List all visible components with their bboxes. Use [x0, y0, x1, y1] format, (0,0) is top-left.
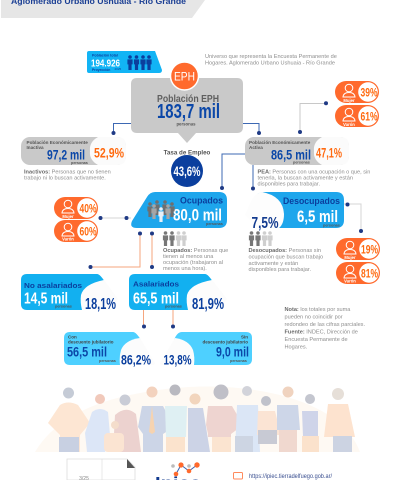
universe description: Universo que representa la Encuesta Permanente de — [205, 54, 337, 60]
text: PEA — [258, 170, 370, 188]
text: PEA: tenerla, la buscan activamente y están — [258, 176, 353, 182]
pills: ocupados gender: Varón — [62, 236, 74, 242]
panel: desocupados: Desocupados — [283, 196, 340, 207]
panel: desocupados — [245, 192, 344, 232]
pills: ocupados gender: Mujer — [62, 214, 74, 219]
text: nota y fuente: Fuente: INDEC, Dirección de — [284, 330, 358, 336]
panel: no asalariados — [21, 274, 118, 313]
universe description: Hogares. Aglomerado Urbano Ushuaia - Río Grande — [205, 60, 335, 66]
total population chip: 2025 — [114, 67, 122, 71]
text: ocupados: menos una hora). — [163, 266, 207, 272]
panel: población EPH: 183,7 mil — [157, 100, 220, 123]
panel: sin descuento jubilatorio: 9,0 mil — [216, 344, 249, 360]
panel: desocupados: 6,5 mil — [297, 208, 338, 226]
header banner — [1, 0, 205, 18]
text: desocupados: Desocupados: Personas sin — [248, 248, 321, 254]
panel: con descuento jubilatorio: Con — [68, 334, 77, 340]
icon: EPH badge — [170, 62, 198, 90]
text: PEA: PEA: Personas con una ocupación o que, sin — [258, 170, 370, 176]
text: desocupados: ocupación que buscan trabajo — [248, 254, 323, 260]
icon: desocupados people — [249, 231, 273, 246]
pills: ocupados gender: 40% — [80, 202, 97, 216]
text: inactivos: Inactivos: Personas que no tienen — [24, 170, 111, 176]
panel: población inactiva: 97,2 mil — [47, 146, 85, 162]
connector dots — [88, 101, 363, 328]
panel: población activa: personas — [293, 160, 310, 164]
panel: con descuento jubilatorio: 86,2% — [121, 352, 151, 368]
panel: población activa — [245, 137, 349, 165]
icon: document — [67, 459, 135, 480]
text: PEA: disponibles para trabajar. — [258, 182, 320, 188]
pills: PEA gender: Mujer — [343, 98, 355, 103]
text: nota y fuente: redondeo de las cifras parciales. — [284, 322, 365, 328]
panel: desocupados: 7,5% — [252, 215, 278, 232]
panel: población activa: 47,1% — [316, 144, 342, 160]
icon: ocupados people — [163, 231, 187, 246]
panel: población inactiva: 52,9% — [94, 144, 124, 160]
total population chip: 194.926 — [91, 58, 120, 69]
icon: EPH badge: EPH — [174, 70, 195, 84]
panel: ocupados — [131, 192, 227, 228]
panel: población activa: 86,5 mil — [271, 146, 311, 162]
panel: población inactiva — [21, 137, 126, 165]
tasa de empleo — [164, 150, 211, 187]
logo: Ipiec — [155, 462, 201, 480]
panel: población inactiva: Población Económicamente — [26, 140, 88, 145]
panel: ocupados: personas — [206, 222, 223, 226]
panel: población EPH: personas — [176, 122, 196, 126]
panel: no asalariados: personas — [55, 304, 72, 308]
universe description — [205, 54, 337, 66]
panel: población inactiva: personas — [71, 161, 88, 165]
panel: con descuento jubilatorio — [64, 332, 155, 368]
pills: desocupados gender: Varón — [344, 278, 356, 284]
text: desocupados: disponibles para trabajar. — [248, 267, 311, 273]
pills: PEA gender — [335, 81, 379, 127]
icon: group of people — [147, 200, 175, 222]
pills: PEA gender: 61% — [360, 110, 378, 124]
panel: con descuento jubilatorio: 56,5 mil — [67, 344, 107, 360]
tasa de empleo: Tasa de Empleo — [164, 150, 211, 156]
illustration: group of people — [35, 384, 360, 452]
panel: población EPH — [131, 78, 243, 143]
panel: ocupados: 80,0 mil — [173, 206, 222, 224]
text: ocupados — [163, 248, 228, 272]
text: nota y fuente: Hogares. — [284, 344, 308, 350]
panel: sin descuento jubilatorio: Sin — [241, 334, 248, 340]
total population chip: Proyección — [92, 68, 110, 72]
panel: población EPH: Población EPH — [157, 93, 219, 105]
panel: con descuento jubilatorio: descuento jubilatorio — [68, 340, 114, 344]
pills: desocupados gender: 19% — [361, 242, 378, 256]
panel: sin descuento jubilatorio — [160, 332, 252, 368]
text: nota y fuente: Encuesta Permanente de — [284, 337, 348, 343]
panel: con descuento jubilatorio: personas — [99, 359, 116, 363]
text: nota y fuente — [284, 307, 365, 350]
text: desocupados — [248, 248, 323, 273]
pills: PEA gender: Varón — [343, 122, 355, 127]
text: nota y fuente: Nota: los totales por suma — [284, 307, 351, 313]
pills: desocupados gender — [336, 238, 380, 284]
panel: asalariados: personas — [165, 304, 182, 308]
pills: ocupados gender — [54, 197, 98, 242]
text: inactivos: trabajo ni lo buscan activamente. — [24, 176, 106, 182]
panel: población activa: Activa — [249, 145, 263, 150]
panel: sin descuento jubilatorio: 13,8% — [164, 352, 192, 368]
panel: desocupados: personas — [323, 224, 340, 228]
tasa de empleo: 43,6% — [174, 163, 201, 179]
panel: sin descuento jubilatorio: descuento jubilatorio — [202, 340, 248, 344]
text: ocupados: Ocupados: Personas que — [163, 248, 228, 254]
text: ocupados: tienen al menos una — [163, 254, 214, 260]
text: nota y fuente: pueden no coincidir por — [284, 314, 343, 320]
pills: desocupados gender: Mujer — [344, 255, 356, 260]
total population chip: Población total — [92, 54, 118, 58]
text: desocupados: activamente y están — [248, 261, 298, 267]
text: inactivos — [24, 170, 111, 182]
text: ocupados: ocupación (trabajaron al — [163, 260, 223, 266]
panel: asalariados — [129, 274, 227, 313]
website link — [234, 472, 332, 480]
panel: asalariados: 65,5 mil — [133, 290, 179, 308]
panel: población inactiva: Inactiva — [26, 145, 44, 150]
connectors — [90, 104, 361, 326]
panel: ocupados: Ocupados — [180, 196, 223, 206]
total population chip — [87, 51, 162, 73]
pills: ocupados gender: 60% — [80, 224, 97, 238]
panel: asalariados: Asalariados — [133, 280, 179, 288]
panel: asalariados: 81,9% — [192, 296, 224, 313]
panel: población activa: Población Económicamente — [249, 140, 311, 145]
panel: no asalariados: 14,5 mil — [24, 290, 68, 308]
pills: desocupados gender: 81% — [361, 266, 378, 280]
website link: https://ipiec.tierradelfuego.gob.ar/ — [249, 474, 332, 480]
panel: no asalariados: 18,1% — [85, 296, 116, 313]
pills: PEA gender: 39% — [360, 86, 378, 100]
panel: sin descuento jubilatorio: personas — [230, 359, 247, 363]
panel: no asalariados: No asalariados — [24, 281, 82, 290]
